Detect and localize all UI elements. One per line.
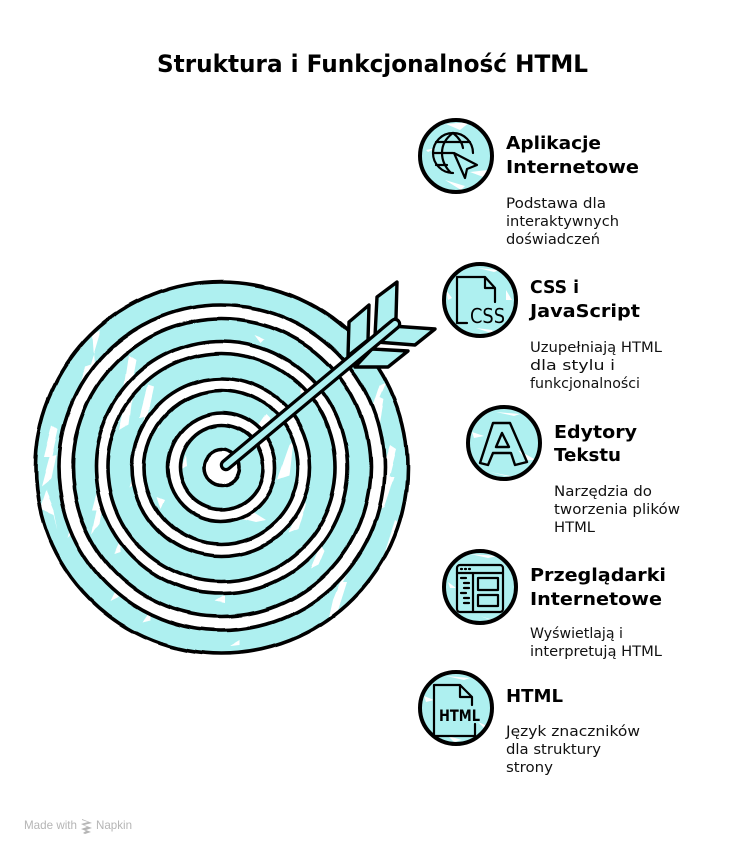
description: tworzenia plików (554, 502, 680, 518)
heading: HTML (506, 686, 563, 707)
description: dla struktury (506, 742, 601, 758)
description: interpretują HTML (530, 644, 662, 660)
icon: CSS file (444, 264, 516, 336)
heading: CSS i (530, 277, 579, 298)
title: Struktura i Funkcjonalność HTML (157, 50, 588, 78)
target chart (36, 282, 435, 660)
heading: Internetowe (530, 589, 662, 610)
heading: Internetowe (506, 157, 639, 178)
icon: CSS file: CSS (470, 304, 505, 328)
item: CSS i JavaScript (444, 264, 662, 392)
description: Język znaczników (505, 724, 640, 740)
footer: Made with Napkin: Made with (24, 818, 77, 832)
description: strony (506, 760, 553, 776)
description: funkcjonalności (530, 376, 640, 392)
item: HTML (420, 672, 640, 776)
icon: HTML file: HTML (439, 706, 480, 725)
description: Narzędzia do (554, 484, 652, 500)
footer: Made with Napkin: Napkin (96, 818, 132, 832)
description: Uzupełniają HTML (530, 340, 662, 356)
icon: globe with cursor (420, 120, 492, 192)
description: doświadczeń (506, 232, 600, 248)
heading: Edytory (554, 422, 637, 443)
item: Edytory Tekstu (468, 407, 680, 536)
heading: JavaScript (528, 301, 640, 322)
heading: Tekstu (554, 445, 621, 466)
description: Podstawa dla (506, 196, 606, 212)
footer: Made with Napkin (24, 818, 132, 834)
description: HTML (554, 520, 595, 536)
item: Aplikacje Internetowe (420, 120, 639, 248)
target rings (36, 282, 408, 660)
heading: Aplikacje (506, 133, 601, 154)
arrow (226, 282, 435, 465)
arrow shaft (226, 324, 395, 465)
description: Wyświetlają i (530, 626, 623, 642)
icon: browser window (444, 551, 516, 623)
heading: Przeglądarki (530, 565, 666, 586)
item: Przeglądarki Internetowe (444, 551, 666, 660)
description: interaktywnych (506, 214, 619, 230)
icon: letter A (468, 407, 540, 479)
arrow fletching (348, 282, 435, 367)
description: dla stylu i (530, 358, 615, 374)
icon: HTML file (420, 672, 492, 744)
